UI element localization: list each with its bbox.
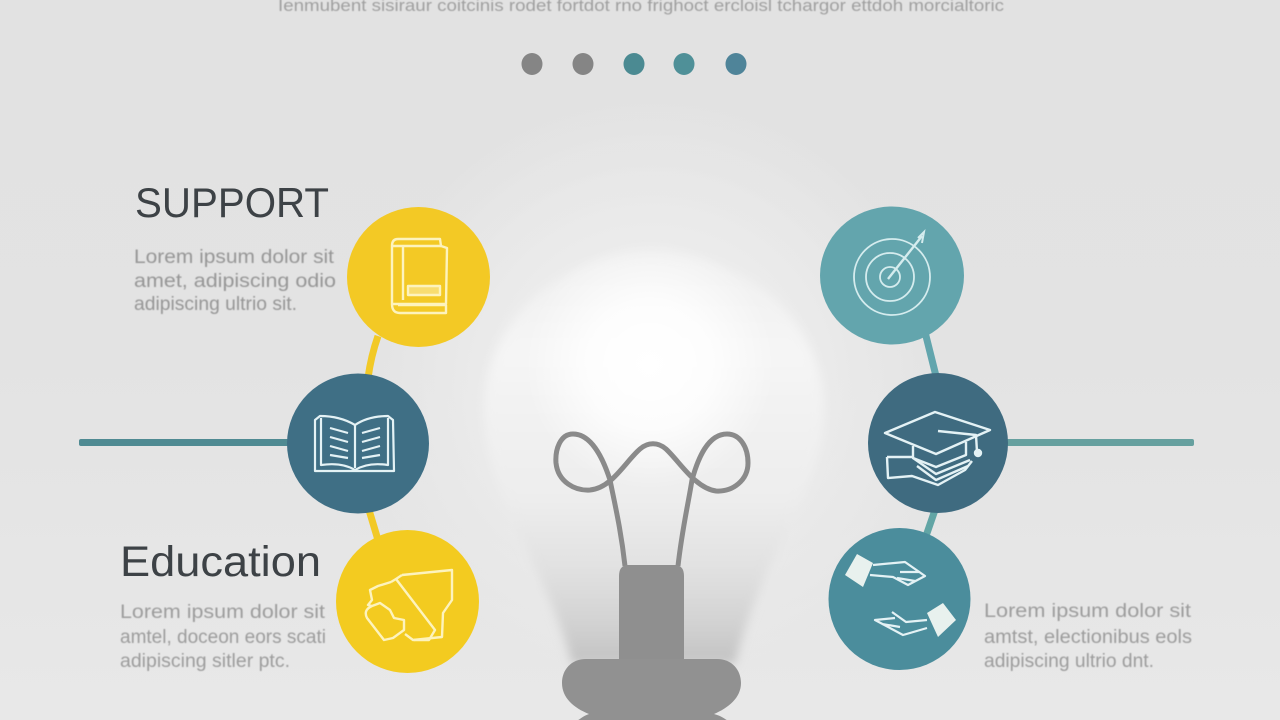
background glow — [362, 100, 942, 680]
bulb stem — [619, 565, 684, 664]
icon: graduation cap and hand — [885, 412, 990, 485]
node: graduation cap — [868, 373, 1008, 513]
connector: teal top to dark right — [925, 332, 936, 376]
node: target — [820, 206, 964, 344]
node: hands — [828, 528, 970, 670]
node: gloves — [336, 530, 479, 673]
support body text: Lorem ipsum dolor sit — [134, 247, 335, 268]
right horizontal line — [1005, 439, 1194, 446]
icon: open book — [315, 416, 394, 471]
heading: support: SUPPORT — [135, 179, 329, 226]
bulb bright core — [525, 240, 775, 490]
connector: yellow top to dark left — [368, 336, 378, 378]
heading: education: Education — [120, 538, 321, 586]
node: open book — [287, 374, 429, 514]
support body text: amet, adipiscing odio — [134, 271, 336, 292]
icon: two hands — [845, 554, 956, 637]
icon: gloves — [366, 570, 452, 640]
education body text: Lorem ipsum dolor sit — [120, 602, 326, 623]
right body text: amtst, electionibus eols — [984, 627, 1192, 648]
connector: dark left to yellow bottom — [369, 510, 378, 540]
bulb glass — [484, 252, 824, 664]
node: closed book — [347, 207, 490, 347]
bulb screw base — [562, 659, 741, 720]
connector: dark right to teal bottom — [926, 510, 935, 536]
icon: target — [854, 232, 930, 315]
right body text: Lorem ipsum dolor sit — [984, 601, 1192, 622]
lower hand — [875, 603, 956, 637]
light bulb — [484, 240, 824, 720]
upper hand — [845, 554, 925, 587]
left horizontal line — [79, 439, 291, 446]
filament — [556, 434, 748, 566]
education body text: amtel, doceon eors scati — [120, 627, 326, 648]
support body text: adipiscing ultrio sit. — [134, 294, 297, 315]
right body text: adipiscing ultrio dnt. — [984, 651, 1154, 672]
icon: closed book — [392, 239, 447, 313]
education body text: adipiscing sitler ptc. — [120, 651, 290, 672]
progress dots — [522, 53, 746, 75]
